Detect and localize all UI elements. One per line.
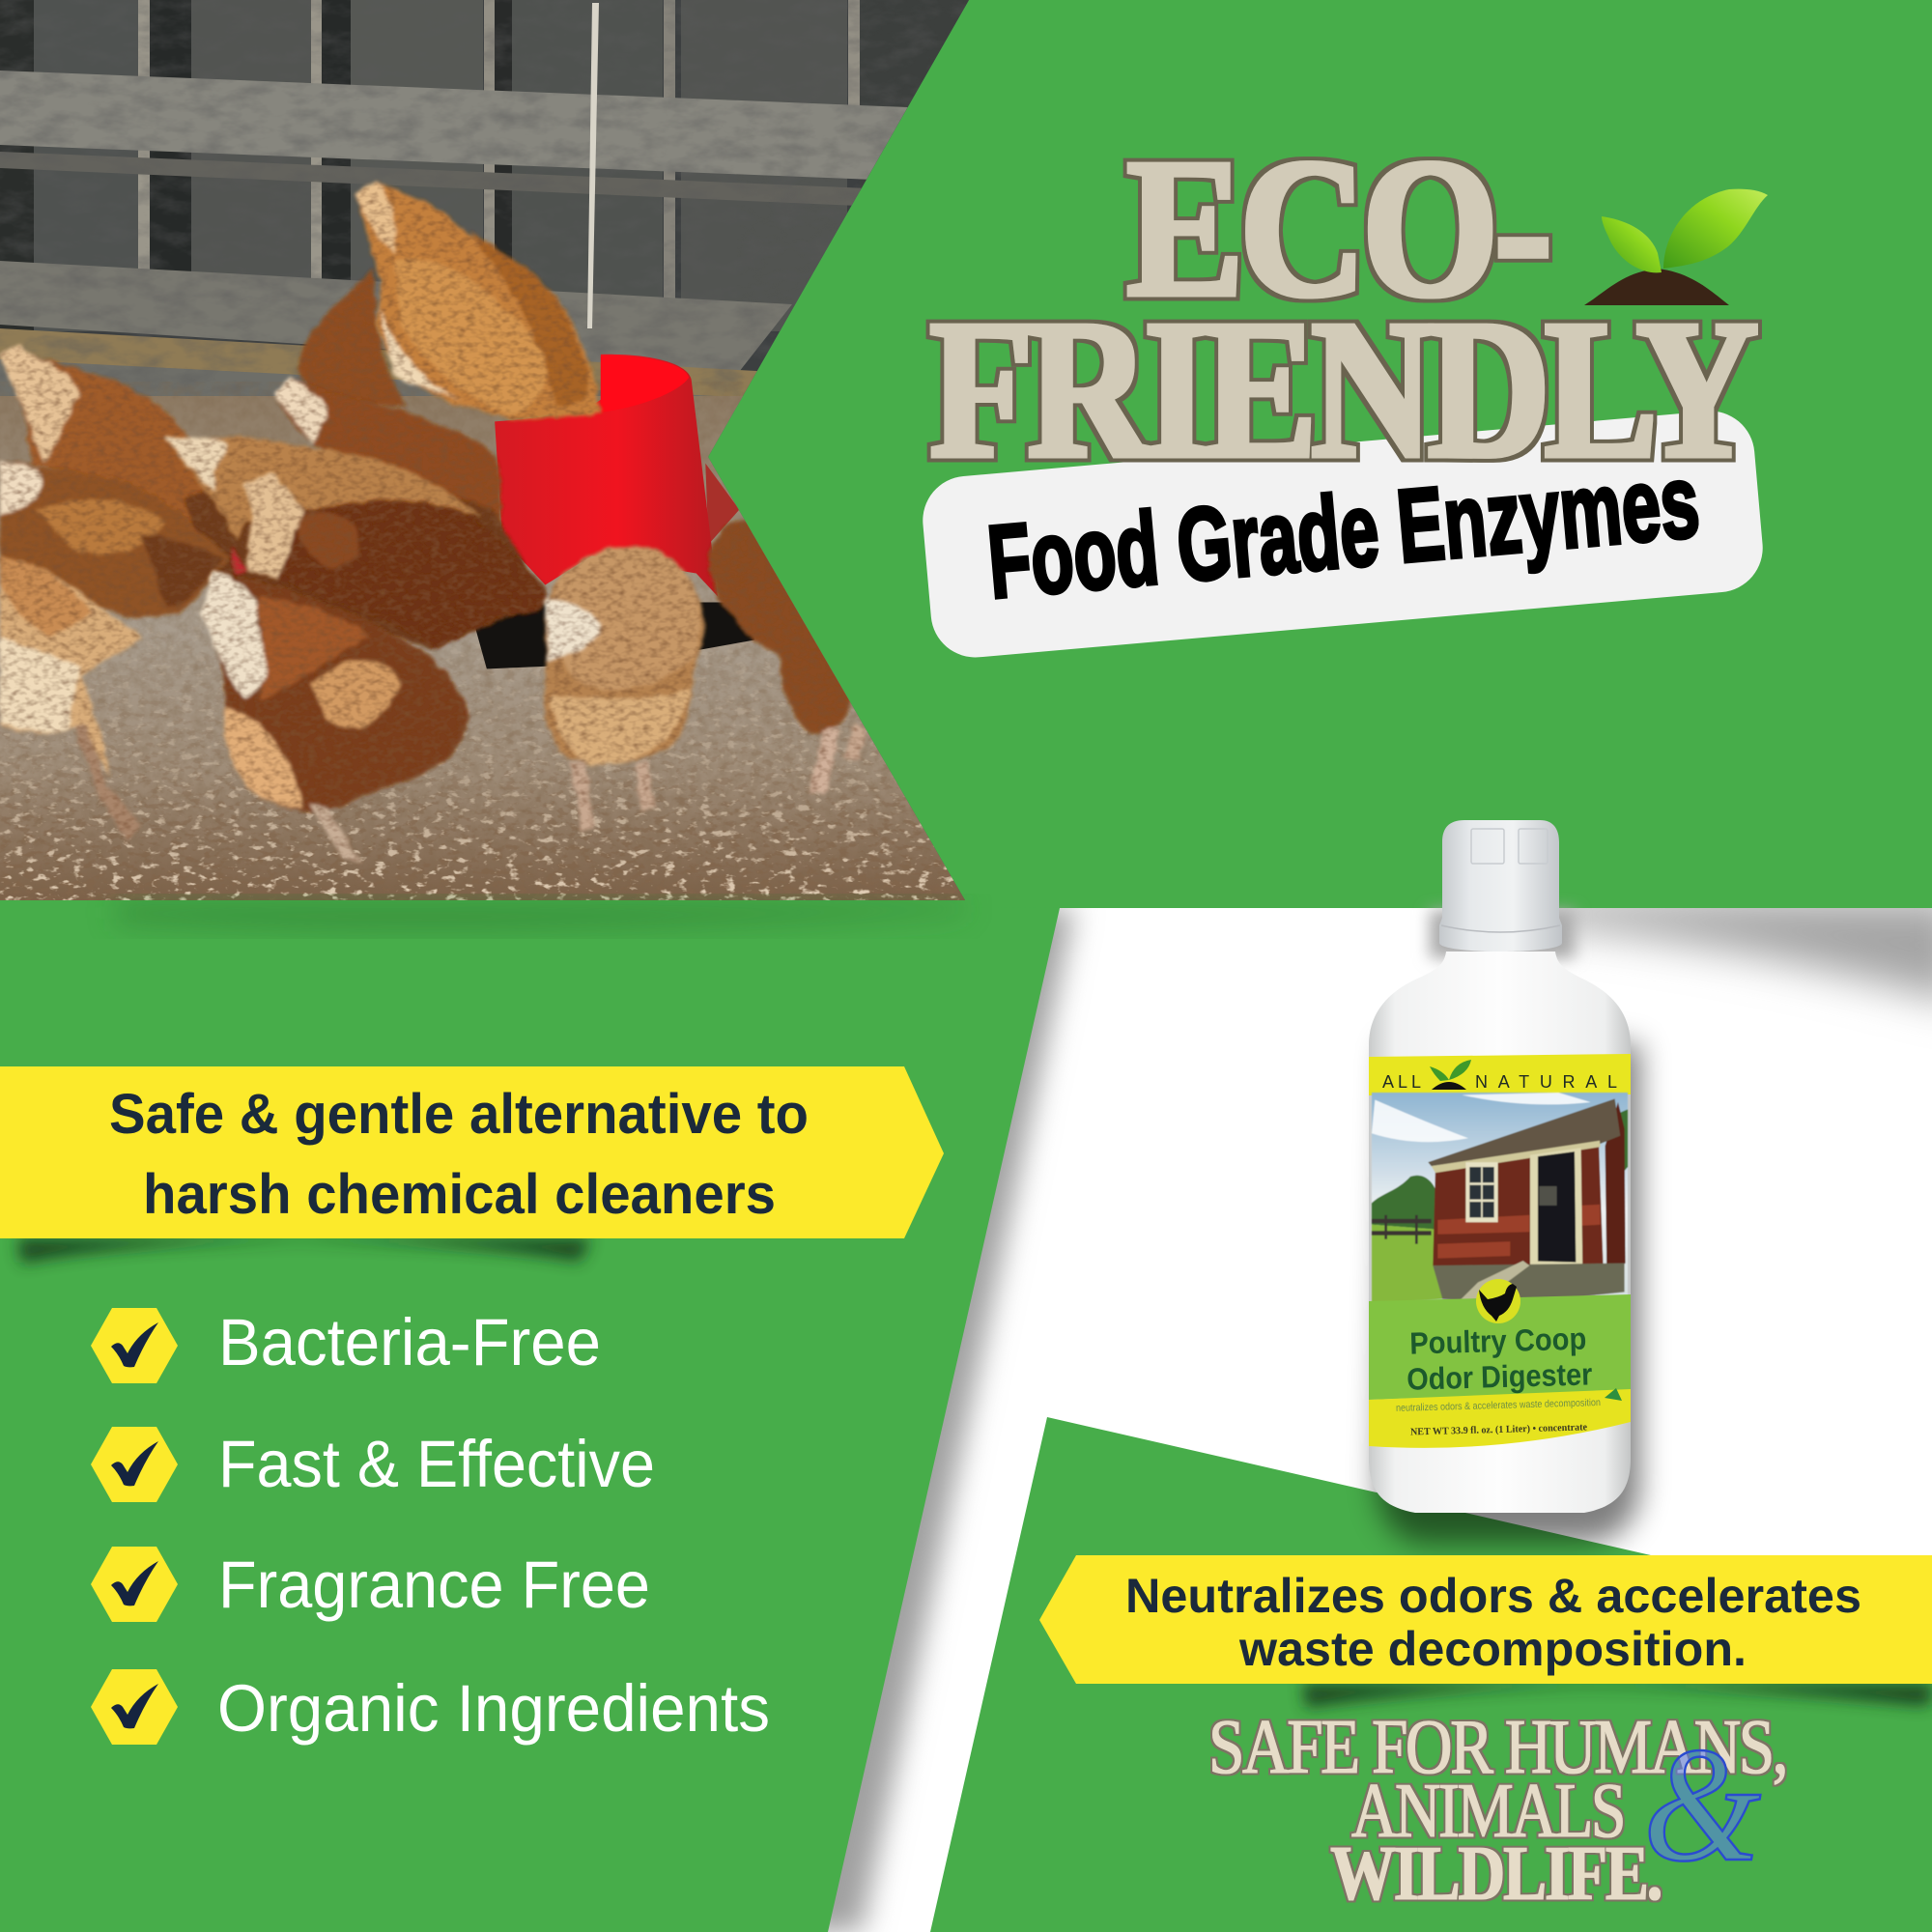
panel: lower right green — [930, 1417, 1932, 1932]
benefit: Fragrance Free — [91, 1547, 650, 1622]
icon: hexagon check — [91, 1427, 178, 1502]
chicken badge — [1476, 1279, 1520, 1323]
left leaf — [1602, 216, 1662, 272]
banner text line 2: waste decomposition. — [1238, 1622, 1747, 1676]
bottle cap — [1439, 820, 1562, 952]
line 3: WILDLIFE. — [1330, 1832, 1661, 1917]
label yellow foot band — [1369, 1389, 1631, 1448]
natural text: NATURAL — [1475, 1072, 1617, 1092]
feeder rope — [587, 3, 599, 328]
feeder base — [469, 602, 754, 668]
product name — [1406, 1321, 1593, 1397]
icon: sprout — [1584, 189, 1768, 305]
product name line 1: Poultry Coop — [1409, 1321, 1587, 1361]
stone foundation — [1433, 1264, 1625, 1304]
icon: hexagon check — [91, 1669, 178, 1745]
hen: tan middle — [165, 438, 480, 542]
bottle body — [1369, 952, 1631, 1513]
house side — [1605, 1102, 1626, 1275]
straw litter floor — [0, 396, 976, 908]
wood chips — [0, 652, 960, 900]
icon: hexagon check — [91, 1308, 178, 1383]
grass — [1372, 1225, 1442, 1304]
hen: second row centre — [274, 377, 500, 536]
label: Fast & Effective — [218, 1427, 655, 1501]
hen: large front — [200, 572, 468, 863]
pill: Food Grade Enzymes — [919, 408, 1767, 661]
house wall — [1433, 1142, 1604, 1275]
title line 2: FRIENDLY — [929, 278, 1756, 499]
benefit: Bacteria-Free — [91, 1305, 601, 1383]
bottle: Poultry Coop Odor Digester — [1369, 820, 1631, 1513]
wall panels — [0, 0, 976, 331]
all natural text: ALL — [1382, 1072, 1421, 1092]
banner shadow: right — [1302, 1684, 1932, 1708]
banner text line 2: harsh chemical cleaners — [143, 1163, 776, 1226]
small logo — [1605, 1388, 1622, 1401]
benefit: Organic Ingredients — [91, 1669, 770, 1746]
tagline: neutralizes odors & accelerates waste decomposition — [1396, 1397, 1601, 1414]
banner: neutralizes odors — [1039, 1555, 1932, 1684]
hen: far right — [708, 521, 866, 793]
trees — [1372, 1176, 1436, 1230]
shadow cast on white by left green panel — [773, 908, 1074, 1932]
wall rails — [0, 71, 908, 425]
safe for humans heading — [1208, 1705, 1786, 1917]
shadow cast on white by top green panel — [1526, 898, 1932, 1005]
roof — [1428, 1098, 1620, 1166]
hen: rear — [298, 270, 407, 406]
panel: lower left green — [0, 900, 1060, 1932]
label: Organic Ingredients — [217, 1671, 770, 1746]
product name line 2: Odor Digester — [1406, 1356, 1593, 1397]
label green band — [1369, 1294, 1631, 1400]
hen: head in feeder — [356, 181, 600, 420]
hen: left middle — [0, 461, 231, 617]
banner text: Safe & gentle alternative to — [109, 1083, 809, 1146]
banner text line 1: Neutralizes odors & accelerates — [1125, 1569, 1861, 1623]
label: Bacteria-Free — [218, 1305, 601, 1379]
banner shadow: left — [17, 1238, 591, 1264]
hen: lower left pale — [0, 556, 143, 839]
icon: hexagon check — [91, 1547, 178, 1622]
hen: second row left — [0, 345, 218, 539]
right leaf — [1663, 189, 1768, 269]
line 1: SAFE FOR HUMANS, — [1208, 1705, 1786, 1790]
label: Fragrance Free — [218, 1548, 650, 1622]
label yellow band — [1369, 1054, 1631, 1095]
benefit: Fast & Effective — [91, 1427, 655, 1502]
bottle shadow — [1377, 910, 1640, 1544]
hen: behind feeder right — [705, 464, 739, 545]
banner: safe and gentle — [0, 1066, 944, 1238]
title line 1: ECO- — [1126, 117, 1548, 338]
red feeder bucket — [495, 355, 718, 596]
window — [1465, 1162, 1498, 1222]
label photo: coop — [1372, 1093, 1628, 1304]
line 2: ANIMALS — [1351, 1769, 1624, 1854]
clouds — [1372, 1093, 1591, 1142]
backing: bodies between hens — [184, 490, 530, 651]
door — [1530, 1148, 1582, 1269]
net weight: NET WT 33.9 fl. oz. (1 Liter) • concentrate — [1410, 1422, 1587, 1438]
shadow under photo — [116, 902, 966, 930]
ampersand: & — [1643, 1714, 1761, 1895]
label logo — [1430, 1060, 1471, 1090]
fence — [1372, 1215, 1432, 1244]
photo: hens feeding in a coop — [0, 0, 976, 908]
title: Eco-Friendly — [929, 117, 1756, 499]
panel: top green — [0, 0, 1932, 908]
hen: dark brown centre — [231, 472, 549, 648]
soil mound — [1584, 269, 1729, 305]
hen: feathered tan centre right — [543, 546, 704, 831]
